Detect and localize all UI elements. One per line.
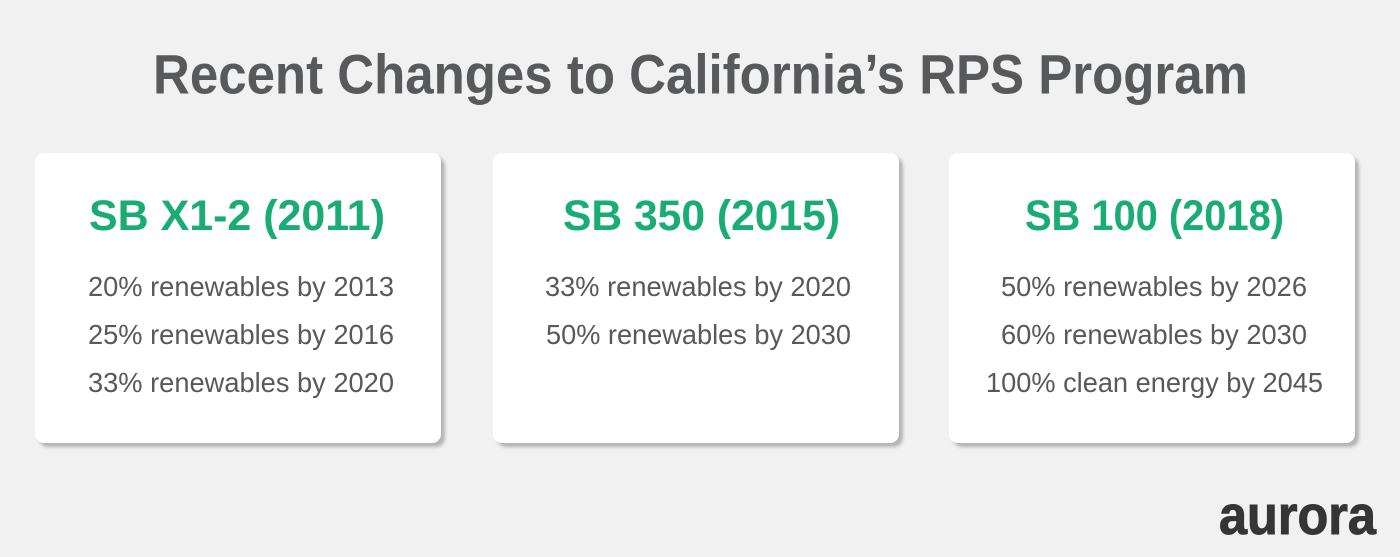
text block: SB X1-2 targets: 33% renewables by 2020 <box>88 367 394 398</box>
text block: SB X1-2 targets <box>88 271 394 398</box>
text block: SB 100 targets: 60% renewables by 2030 <box>1001 319 1307 350</box>
text block: SB X1-2 targets: 20% renewables by 2013 <box>88 271 394 302</box>
text block: SB 100 targets: 50% renewables by 2026 <box>1001 271 1307 302</box>
text block: SB 350 targets <box>545 271 851 350</box>
heading: SB 350 (2015): SB 350 (2015) <box>563 192 840 240</box>
text block: SB 350 targets: 50% renewables by 2030 <box>546 319 851 350</box>
heading: SB 100 (2018): SB 100 (2018) <box>1025 192 1284 240</box>
heading: SB X1-2 (2011): SB X1-2 (2011) <box>89 192 385 240</box>
panel: SB 100 (2018) <box>949 153 1359 447</box>
panel: SB 350 (2015) <box>493 153 903 447</box>
title: Recent Changes to California’s RPS Program <box>153 42 1248 106</box>
text block: SB 100 targets <box>986 271 1323 398</box>
text block: SB 350 targets: 33% renewables by 2020 <box>545 271 851 302</box>
text block: SB 100 targets: 100% clean energy by 2045 <box>986 367 1323 398</box>
text block: SB X1-2 targets: 25% renewables by 2016 <box>88 319 394 350</box>
panel: SB X1-2 (2011) <box>35 153 445 447</box>
logo: aurora: aurora <box>1219 484 1376 546</box>
